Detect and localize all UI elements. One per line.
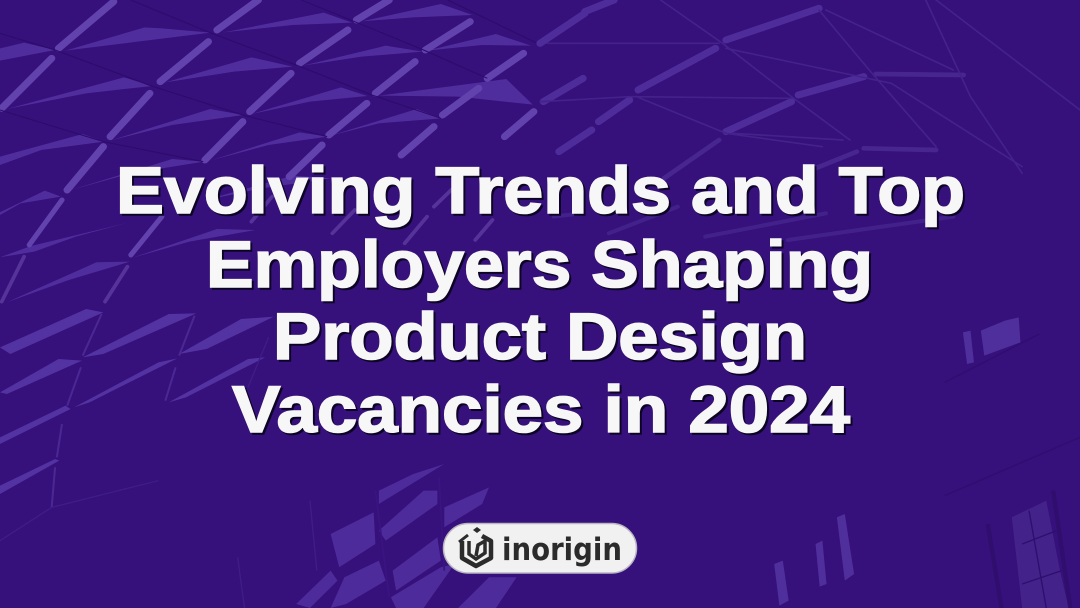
title shadow: Evolving Trends and Top <box>118 155 967 229</box>
title shadow: Employers Shaping <box>208 229 875 303</box>
title text: Product Design <box>273 299 807 373</box>
icon: inorigin hexagon <box>459 527 491 566</box>
title text <box>116 153 965 446</box>
title shadow: Vacancies in 2024 <box>234 374 852 448</box>
title text: Employers Shaping <box>206 227 873 301</box>
title text: Evolving Trends and Top <box>116 153 965 227</box>
logo badge <box>444 524 636 573</box>
title shadow <box>118 155 967 448</box>
title <box>116 153 967 448</box>
title text: Vacancies in 2024 <box>232 372 850 446</box>
title shadow: Product Design <box>275 301 809 375</box>
logo pill <box>444 524 636 573</box>
logo wordmark: inorigin <box>502 532 622 568</box>
